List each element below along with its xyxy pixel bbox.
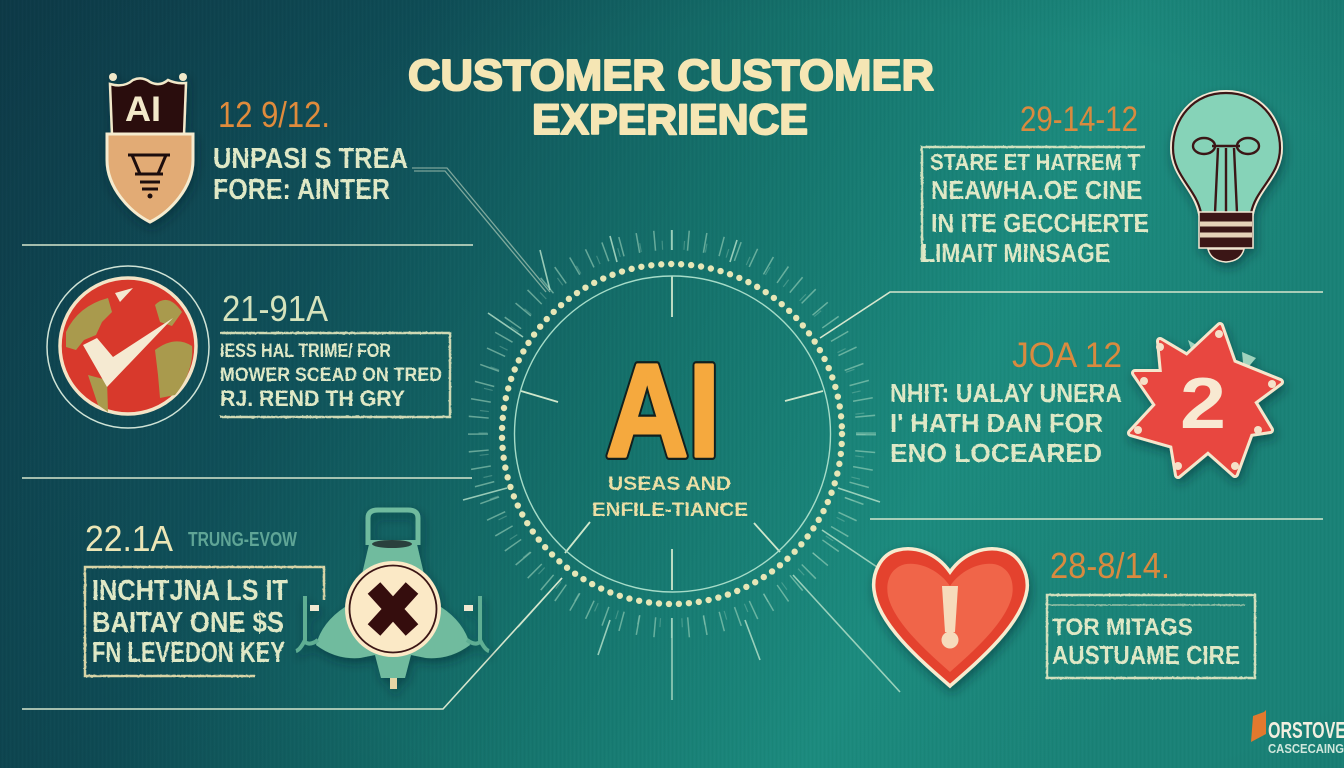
icon: shield AI <box>107 73 193 222</box>
hub caption <box>592 474 748 521</box>
title <box>408 51 934 144</box>
description: I' HATH DAN FOR <box>890 408 1103 438</box>
check mark <box>83 318 173 387</box>
description: ENO LOCEARED <box>890 438 1102 468</box>
bordered description <box>921 147 1149 268</box>
logo <box>1251 710 1344 756</box>
bordered description: FN LEVEDON KEY <box>92 637 285 669</box>
description <box>890 378 1122 468</box>
title: CUSTOMER CUSTOMER <box>408 51 934 100</box>
AI big label: AI <box>606 337 720 484</box>
bordered description: MOWER SCEAD ON TRED <box>220 365 442 386</box>
bordered description: AUSTUAME CIRE <box>1052 640 1240 670</box>
central hub <box>463 230 900 700</box>
icon: light bulb <box>1172 92 1281 262</box>
bordered description: NEAWHA.OE CINE <box>931 175 1142 205</box>
bordered description: BAITAY ONE $S <box>92 607 284 639</box>
hub caption: ENFILE-TIANCE <box>592 500 748 521</box>
icon: star badge <box>1131 326 1280 475</box>
AI big label: AI <box>606 337 720 484</box>
date: JOA 12 <box>1012 336 1122 375</box>
date: 12 9/12. <box>218 94 330 135</box>
bordered description: IN ITE GECCHERTE <box>931 208 1149 238</box>
panel: item 2 middle left <box>47 266 450 428</box>
panel: item 5 middle right <box>890 326 1280 475</box>
bordered description <box>1047 595 1255 678</box>
description: FORE: AINTER <box>213 174 390 206</box>
hub caption: USEAS AND <box>608 474 731 495</box>
radial tick rings <box>478 240 866 628</box>
panel: item 1 top left <box>107 73 408 222</box>
date: 29-14-12 <box>1020 100 1138 139</box>
long radial lines <box>463 230 900 700</box>
panel: item 4 top right <box>921 92 1281 268</box>
dotted ring <box>502 264 842 604</box>
bordered description: INCHTJNA LS IT <box>92 575 288 607</box>
description: UNPASI S TREA <box>213 143 408 175</box>
bordered description: IESS HAL TRIME/ FOR <box>220 341 391 362</box>
panel: item 6 bottom right <box>874 545 1255 686</box>
bordered description <box>85 567 324 676</box>
badge number: 2 <box>1180 364 1226 444</box>
description <box>213 143 408 206</box>
bordered description: LIMAIT MINSAGE <box>921 238 1110 268</box>
icon: mint device with X <box>296 510 489 689</box>
inner circle <box>514 276 830 592</box>
date: 21-91A <box>222 288 328 329</box>
bordered description: RJ. REND TH GRY <box>220 386 405 411</box>
date: 22.1A <box>85 518 173 559</box>
bordered description <box>220 333 450 417</box>
bordered description: TOR MITAGS <box>1052 614 1193 641</box>
inner ticks <box>521 276 823 590</box>
description: NHIT: UALAY UNERA <box>890 378 1122 408</box>
title: EXPERIENCE <box>532 96 808 144</box>
icon: shield AI: AI <box>125 90 161 129</box>
icon: heart with exclamation <box>874 549 1027 686</box>
connector lines and dividers <box>22 168 1323 709</box>
small label: TRUNG-EVOW <box>188 529 297 551</box>
icon: globe check <box>47 266 209 428</box>
panel: item 3 bottom left <box>85 510 489 689</box>
date: 28-8/14. <box>1050 545 1170 586</box>
bordered description: STARE ET HATREM T <box>930 149 1140 175</box>
